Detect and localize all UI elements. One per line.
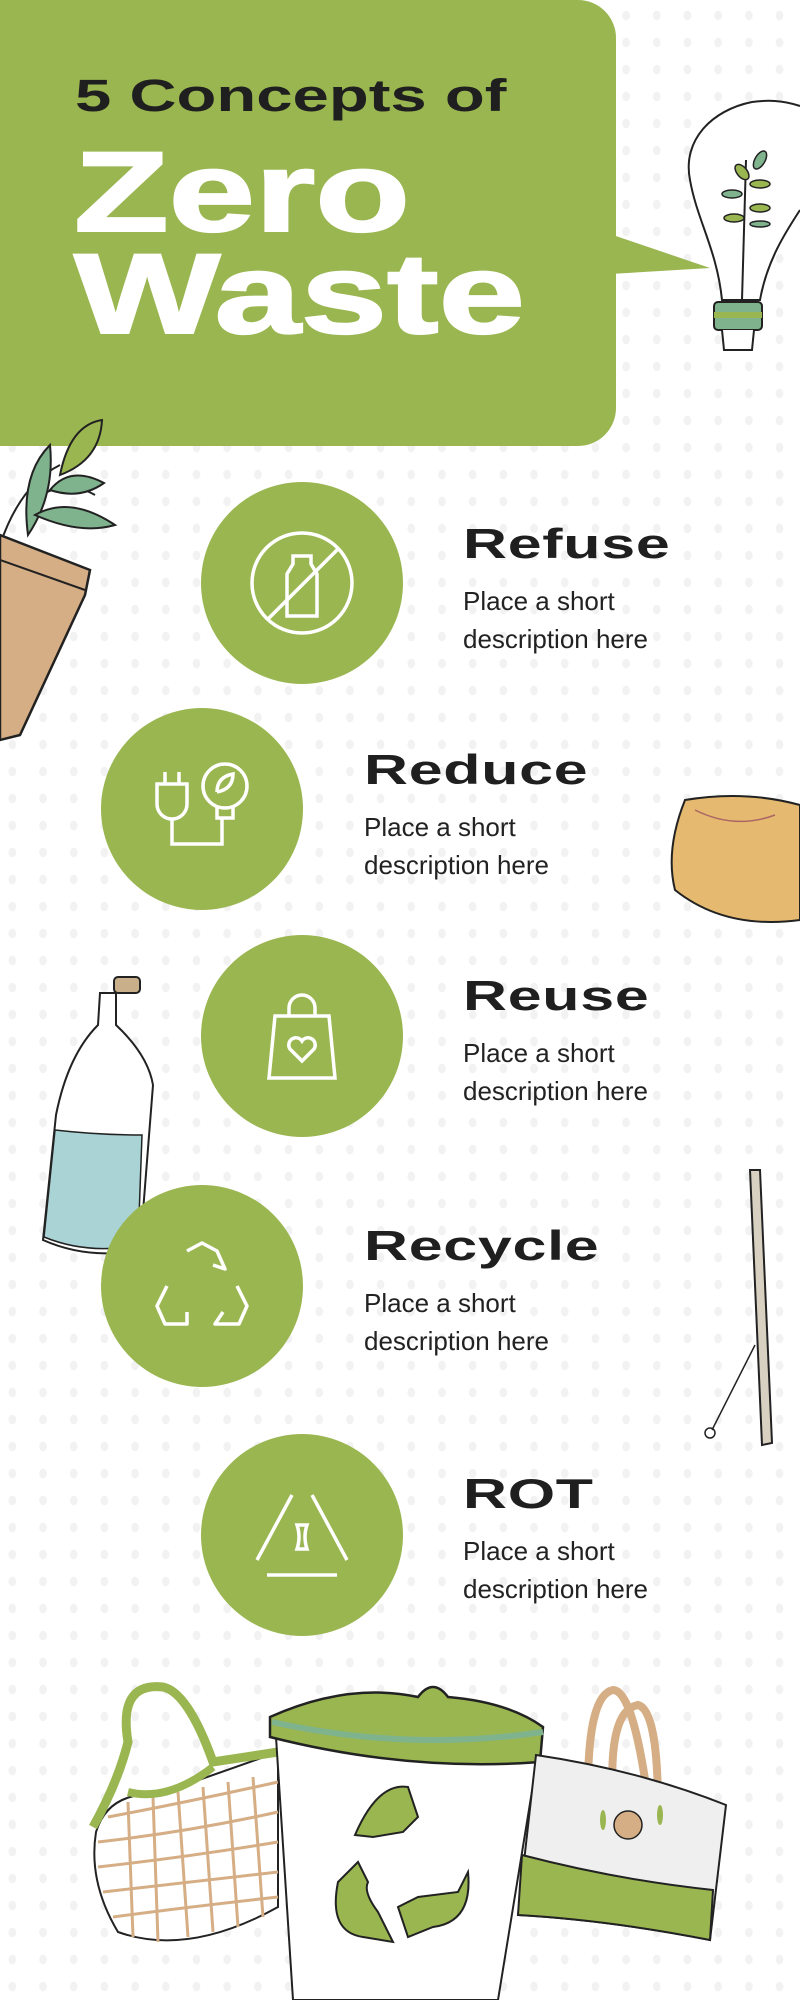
text: recycle [364, 1222, 599, 1356]
item: refuse [201, 482, 403, 684]
text: reduce: Place a short description here [364, 812, 549, 880]
item: recycle [101, 1185, 303, 1387]
icon: no bottle [250, 531, 354, 635]
item: reduce [101, 708, 303, 910]
icon: straw [704, 1169, 773, 1446]
text: refuse [463, 520, 670, 654]
illustration: net bag [89, 1682, 279, 1942]
illustration: tote bag [516, 1686, 728, 1942]
header panel [0, 0, 616, 446]
text: rot [463, 1470, 648, 1604]
icon: light bulb with plant [688, 100, 800, 351]
icon: plug and bulb [155, 762, 249, 846]
text: rot: ROT [463, 1470, 594, 1517]
illustration: recycling bin [268, 1686, 544, 2000]
text: reduce: Reduce [364, 746, 588, 793]
icon: soap [670, 795, 800, 923]
text: recycle: Recycle [364, 1222, 599, 1269]
icon: bag with heart [267, 993, 337, 1080]
text: reduce [364, 746, 588, 880]
text: reuse [463, 972, 649, 1106]
icon: potted plant [0, 418, 118, 742]
text: recycle: Place a short description here [364, 1288, 549, 1356]
text: refuse: Refuse [463, 520, 670, 567]
title [72, 129, 525, 358]
item: rot [201, 1434, 403, 1636]
icon: glass bottle [42, 976, 154, 1254]
text: rot: Place a short description here [463, 1536, 648, 1604]
speech tail [616, 236, 710, 274]
title: Waste [74, 231, 525, 358]
text: reuse: Place a short description here [463, 1038, 648, 1106]
title: Zero [74, 129, 410, 256]
item: reuse [201, 935, 403, 1137]
icon: compost triangle [256, 1494, 348, 1577]
icon: recycle arrows [155, 1241, 249, 1326]
text: reuse: Reuse [463, 972, 649, 1019]
subtitle: 5 Concepts of [75, 70, 506, 121]
text: refuse: Place a short description here [463, 586, 648, 654]
